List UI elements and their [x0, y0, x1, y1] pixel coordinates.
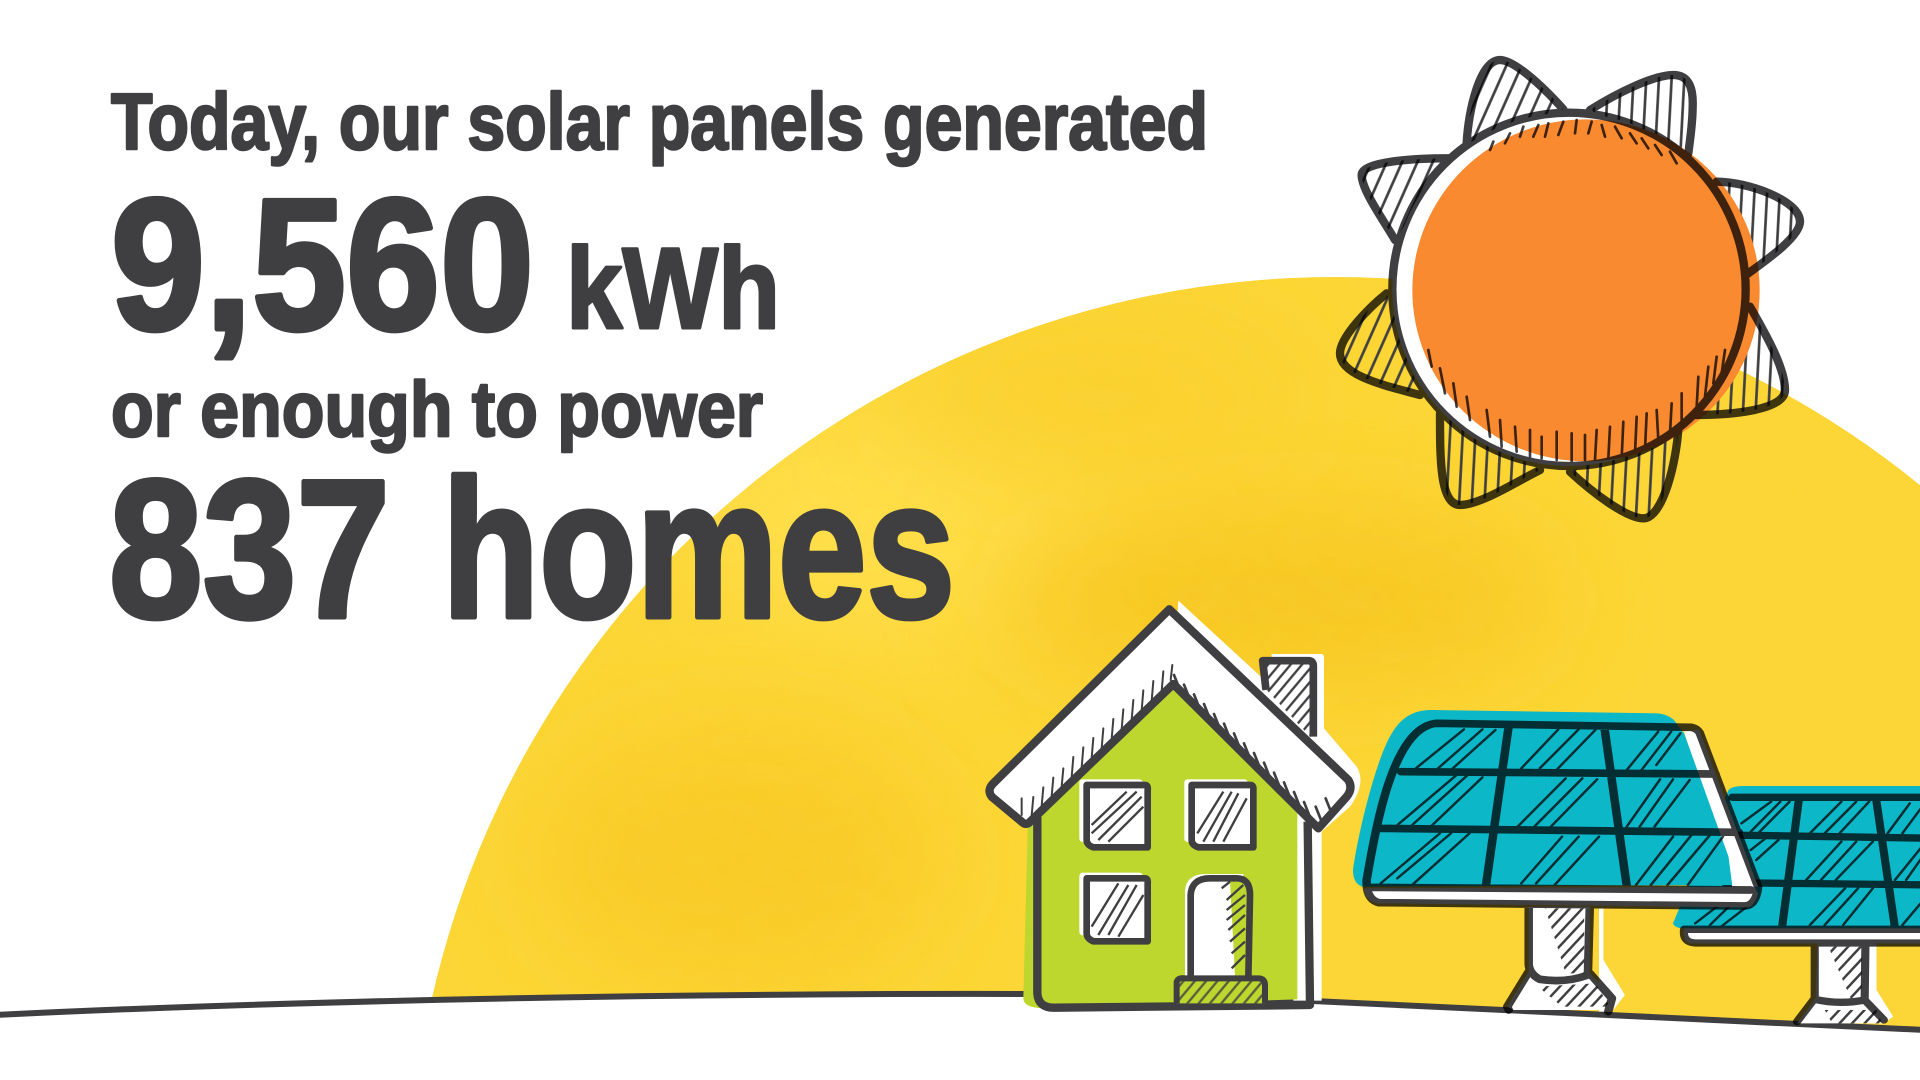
door step [1177, 978, 1265, 1003]
illustration: solar panels [1353, 710, 1920, 1023]
stat: 837 homes: homes [442, 439, 955, 659]
window bottom left [1079, 873, 1148, 941]
illustration: hand-drawn sun [1340, 60, 1800, 518]
door [1185, 874, 1250, 978]
house white offset shadow [1173, 601, 1360, 1001]
stat: 837 homes [109, 439, 955, 659]
window top left [1079, 779, 1148, 847]
roof [990, 609, 1350, 828]
stat: 9,560: 9,560 [111, 160, 534, 369]
stat: 837 homes: 837 [109, 439, 390, 659]
stat unit: kWh: kWh [566, 225, 780, 353]
sun rays hatching [1340, 60, 1800, 518]
heading: today's generation intro: Today, our solar panels generated [111, 77, 1208, 166]
sun orange disc [1412, 119, 1760, 461]
sun outlines [1340, 60, 1800, 518]
ground: white base and horizon line [0, 994, 1920, 1080]
back solar panel [1673, 786, 1920, 1023]
chimney [1263, 660, 1313, 740]
illustration: green house [990, 601, 1360, 1008]
window top right [1184, 779, 1253, 847]
background: watercolor yellow hill sun [380, 260, 1920, 1040]
house green wall [1023, 677, 1297, 1008]
sun white disc [1392, 113, 1746, 466]
house walls outline [1037, 817, 1310, 1008]
subheading: or enough to power: or enough to power [111, 365, 763, 453]
front solar panel [1353, 710, 1758, 1012]
